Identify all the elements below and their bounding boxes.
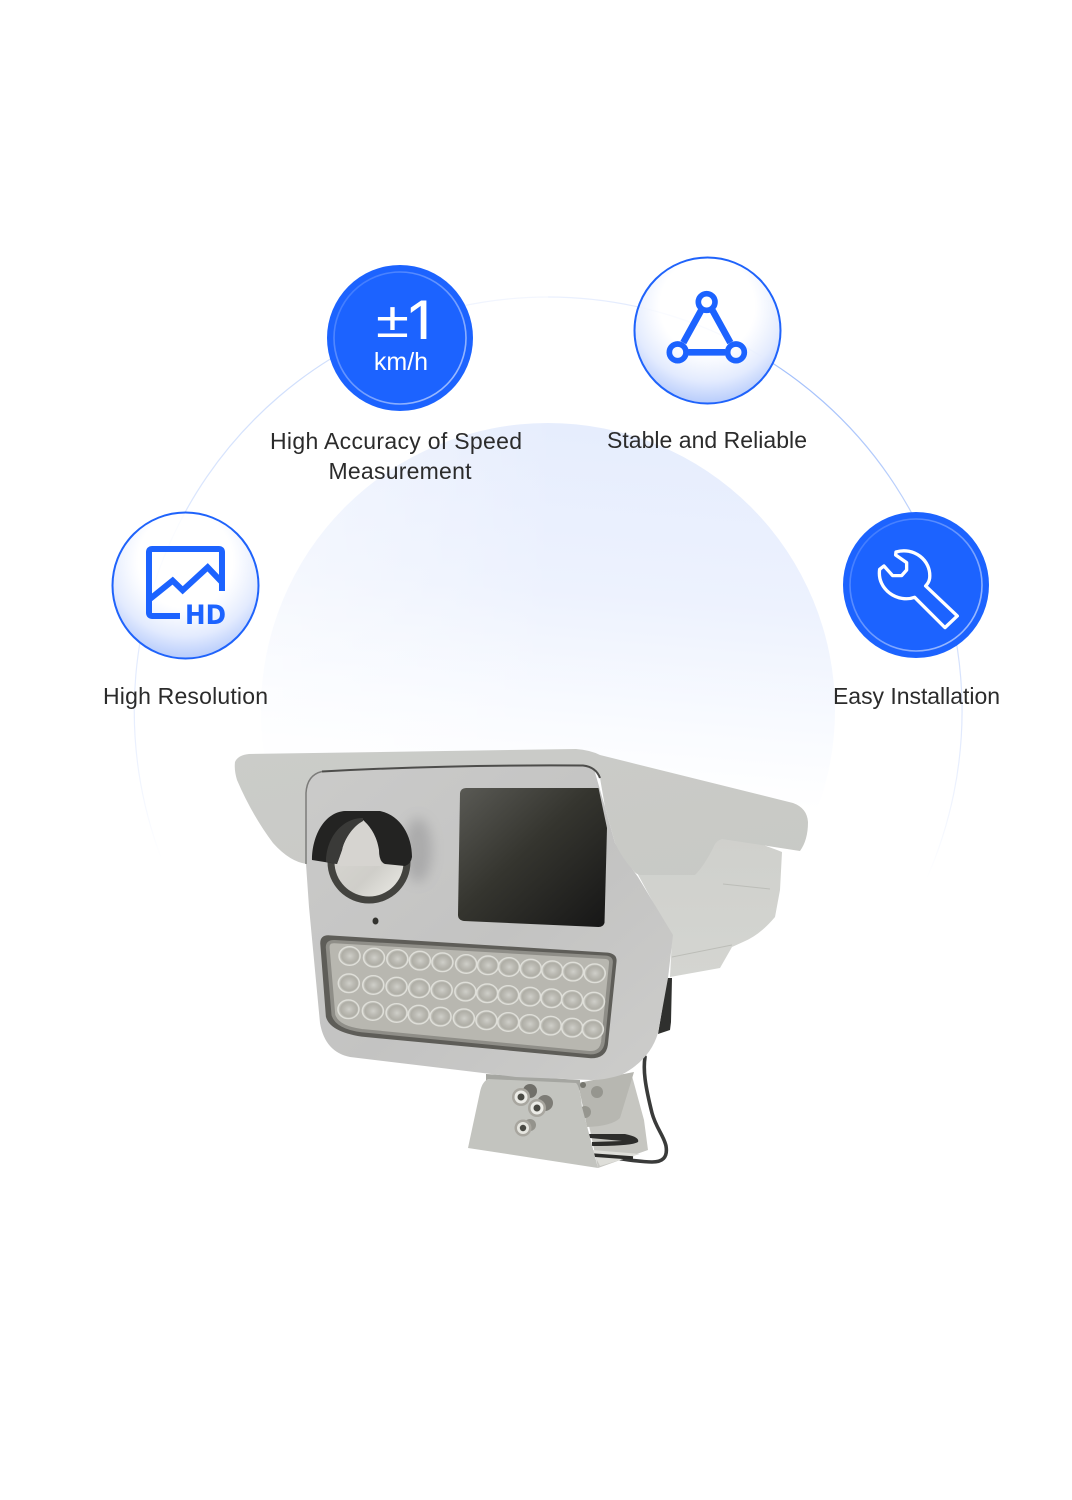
feature: high accuracy — [270, 265, 522, 484]
cable connector — [658, 978, 672, 1034]
camera front face — [300, 755, 673, 1080]
LED row 1 — [339, 947, 605, 983]
icon: HD image: HD — [185, 600, 226, 631]
mount bracket back — [578, 1072, 648, 1168]
label: high resolution: High Resolution — [103, 683, 268, 709]
icon: plus-minus 1 km/h badge: ± — [376, 292, 409, 348]
icon: plus-minus 1 km/h badge — [327, 265, 473, 411]
icon: triangle network — [634, 258, 780, 404]
inner gradient circle — [261, 423, 835, 997]
speed camera product — [235, 749, 808, 1168]
mount bracket front — [468, 1074, 598, 1168]
lens shadow — [404, 818, 432, 882]
sun hood — [235, 749, 808, 875]
dark sensor window — [458, 788, 607, 927]
feature: stable and reliable — [607, 258, 807, 453]
feature: easy installation — [833, 512, 1000, 709]
icon: plus-minus 1 km/h badge: 1 — [405, 286, 440, 358]
icon: wrench badge — [843, 512, 989, 658]
LED row 2 — [338, 974, 604, 1011]
label: high accuracy: Measurement — [328, 458, 472, 484]
camera housing rear — [630, 830, 782, 977]
label: easy installation: Easy Installation — [833, 683, 1000, 709]
mounting nuts — [512, 1084, 553, 1136]
icon: plus-minus 1 km/h badge: km/h — [374, 348, 428, 376]
camera cable — [593, 1057, 666, 1162]
LED row 3 — [338, 1000, 603, 1039]
lens assembly — [312, 811, 412, 904]
hood shadow line — [306, 765, 600, 864]
feature: high resolution — [103, 512, 268, 709]
label: stable and reliable: Stable and Reliable — [607, 427, 807, 453]
large connecting arc — [134, 297, 962, 880]
icon: HD image — [112, 512, 258, 658]
LED panel — [320, 935, 617, 1058]
indicator dot — [372, 918, 378, 924]
label: high accuracy: High Accuracy of Speed — [270, 428, 522, 454]
